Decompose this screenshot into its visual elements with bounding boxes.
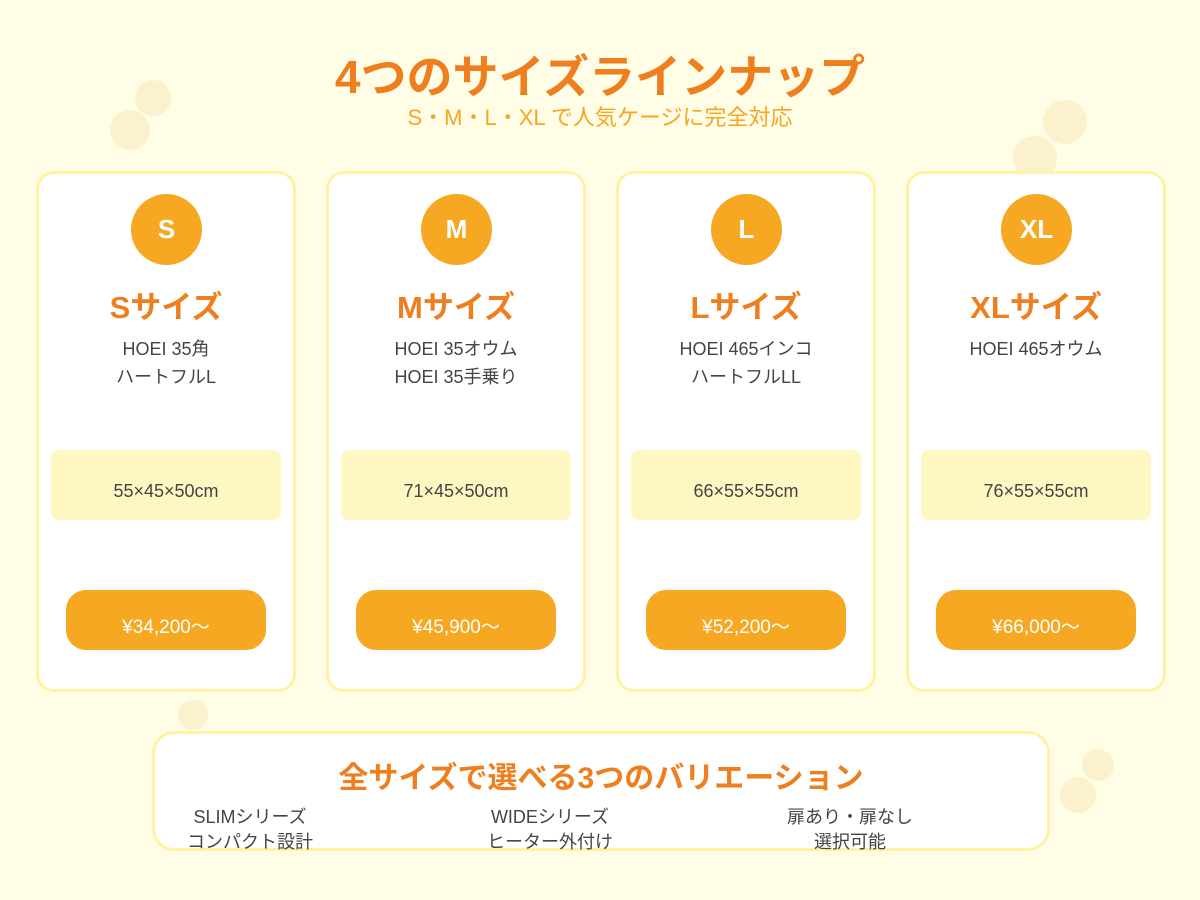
price button (66, 590, 266, 650)
text: door: 扉あり・扉なし (787, 807, 913, 827)
price button (356, 590, 556, 650)
panel: M card (326, 171, 586, 692)
text: WIDE: WIDEシリーズ (491, 807, 609, 827)
text: models (679, 339, 813, 387)
price button: ¥34,200〜 (122, 617, 210, 638)
heading: XLサイズ: XLサイズ (970, 290, 1102, 325)
text: WIDE: ヒーター外付け (487, 832, 613, 852)
heading: variations: 全サイズで選べる3つのバリエーション (338, 762, 864, 795)
text: models: HOEI 465インコ (679, 339, 813, 359)
text: door (787, 807, 913, 852)
text: models: HOEI 465オウム (969, 339, 1103, 359)
text: models: HOEI 35オウム (394, 339, 518, 359)
text: models: HOEI 35手乗り (394, 367, 518, 387)
dimension box (631, 450, 861, 520)
text: WIDE (487, 807, 613, 852)
dimension box: 76×55×55cm (983, 481, 1089, 501)
dimension box: 71×45×50cm (403, 481, 509, 501)
price button (936, 590, 1136, 650)
price button (646, 590, 846, 650)
icon: S badge: S (158, 214, 175, 244)
text: models: HOEI 35角 (122, 339, 210, 359)
icon: L badge (711, 194, 782, 265)
text: SLIM (187, 807, 313, 852)
panel: XL card (906, 171, 1166, 692)
dimension box: 66×55×55cm (693, 481, 799, 501)
text: models (394, 339, 518, 387)
text: door: 選択可能 (814, 832, 886, 852)
text: SLIM: SLIMシリーズ (193, 807, 307, 827)
text: models: ハートフルL (116, 367, 216, 387)
dimension box (921, 450, 1151, 520)
price button: ¥66,000〜 (992, 617, 1080, 638)
panel: S card (36, 171, 296, 692)
subtitle: S・M・L・XL で人気ケージに完全対応 (407, 105, 792, 130)
text: models (116, 339, 216, 387)
panel: variations (152, 731, 1050, 851)
dimension box (51, 450, 281, 520)
title: 4つのサイズラインナップ (335, 51, 865, 103)
panel: L card (616, 171, 876, 692)
icon: L badge: L (739, 214, 754, 244)
text: models: ハートフルLL (691, 367, 801, 387)
heading: Sサイズ: Sサイズ (110, 290, 222, 325)
icon: XL badge: XL (1020, 214, 1053, 244)
price button: ¥52,200〜 (702, 617, 790, 638)
dimension box (341, 450, 571, 520)
text: SLIM: コンパクト設計 (187, 832, 313, 852)
heading: Mサイズ: Mサイズ (397, 290, 515, 325)
icon: S badge (131, 194, 202, 265)
icon: M badge (421, 194, 492, 265)
price button: ¥45,900〜 (412, 617, 500, 638)
dimension box: 55×45×50cm (113, 481, 219, 501)
heading: Lサイズ: Lサイズ (690, 290, 802, 325)
icon: XL badge (1001, 194, 1072, 265)
icon: M badge: M (446, 214, 467, 244)
